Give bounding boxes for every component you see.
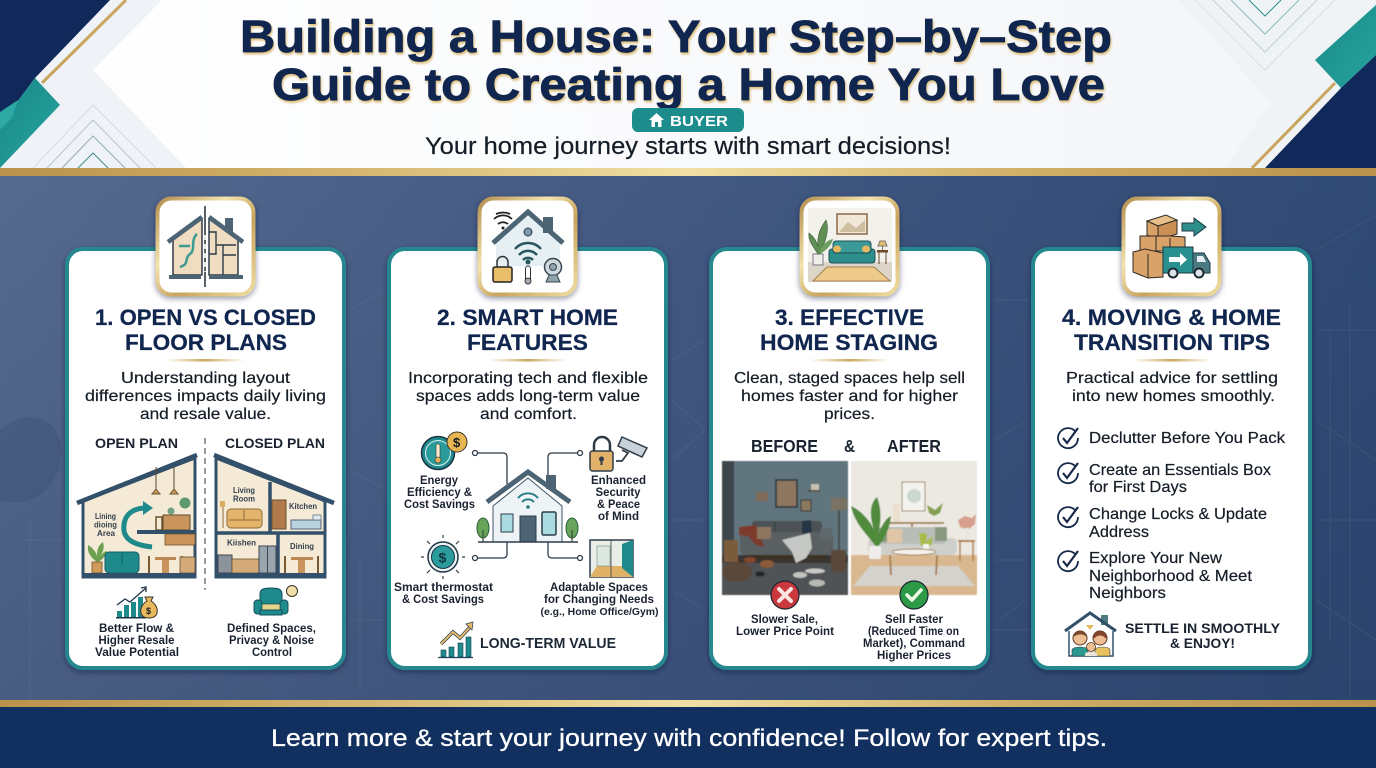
icon: rising bars and money bag: $: [146, 606, 151, 616]
heading: [95, 305, 316, 355]
buyer badge: BUYER: [670, 114, 729, 130]
description: [734, 370, 965, 423]
description: Practical advice for settling: [1066, 370, 1278, 387]
description: differences impacts daily living: [85, 388, 326, 405]
before and after labels: [751, 436, 941, 456]
caption: after: Sell Faster: [885, 612, 943, 626]
panel: moving and home transition tips: [1033, 198, 1310, 668]
title: Building a House: Your Step–by–Step: [240, 11, 1112, 62]
description: [85, 370, 326, 423]
checklist item 2: Create an Essentials Box: [1089, 462, 1271, 479]
caption: closed plan benefit: [227, 621, 316, 659]
closed plan house illustration: Dining: [290, 541, 314, 551]
label: smart thermostat: & Cost Savings: [402, 592, 484, 606]
icon: dollar dial: [421, 535, 465, 579]
icon: thermometer and coin: $: [453, 435, 461, 450]
closed plan house illustration: Kitchen: [289, 501, 317, 511]
caption: before: [736, 612, 834, 638]
closed plan house illustration: [214, 455, 334, 577]
closing message: SETTLE IN SMOOTHLY: [1125, 620, 1281, 636]
heading: FEATURES: [467, 330, 588, 355]
label: enhanced security: & Peace: [597, 497, 640, 511]
heading: [760, 305, 938, 355]
checklist item 3: [1058, 506, 1267, 541]
icon: thermometer and coin: [422, 432, 467, 470]
long-term value label: LONG-TERM VALUE: [480, 635, 616, 652]
heading: [1062, 305, 1281, 355]
icon: staged living room: [802, 198, 898, 294]
label: adaptable spaces: for Changing Needs: [544, 592, 654, 606]
label: energy efficiency: Energy: [420, 473, 458, 487]
label: energy efficiency: Cost Savings: [404, 497, 475, 511]
label: energy efficiency: [404, 473, 475, 511]
central smart house: [477, 472, 578, 542]
description: into new homes smoothly.: [1072, 388, 1275, 405]
heading: 3. EFFECTIVE: [775, 305, 924, 330]
icon: rising bars and money bag: [116, 587, 157, 618]
caption: after: (Reduced Time on: [868, 624, 959, 638]
label: enhanced security: of Mind: [598, 509, 639, 523]
description: homes faster and for higher: [741, 388, 959, 405]
icon: padlock and camera: [590, 437, 647, 471]
icon: smart house: [480, 198, 576, 294]
heading: 4. MOVING & HOME: [1062, 305, 1281, 330]
caption: closed plan benefit: Privacy & Noise: [229, 633, 314, 647]
top gold band: [0, 168, 1376, 176]
caption: open plan benefit: Higher Resale: [98, 633, 175, 647]
buyer badge: [632, 108, 744, 132]
caption: after: Higher Prices: [877, 648, 951, 662]
connector lines: [472, 450, 582, 560]
photo: staged room after: [851, 461, 977, 595]
checklist item 4: Neighbors: [1089, 585, 1166, 602]
label: adaptable spaces: Adaptable Spaces: [550, 580, 648, 594]
label: adaptable spaces: [540, 580, 658, 618]
checklist item 3: Change Locks & Update: [1089, 506, 1267, 523]
caption: before: Slower Sale,: [751, 612, 818, 626]
heading: 1. OPEN VS CLOSED: [95, 305, 316, 330]
heading: HOME STAGING: [760, 330, 938, 355]
caption: after: [863, 612, 965, 662]
plan labels: [95, 435, 325, 451]
description: [408, 370, 648, 423]
photo: cluttered room before: [722, 461, 848, 595]
label: adaptable spaces: (e.g., Home Office/Gym): [540, 606, 658, 618]
before and after labels: BEFORE: [751, 436, 818, 456]
background: blueprint panel: [0, 176, 1376, 701]
footer band: [0, 700, 1376, 768]
checklist item 1: Declutter Before You Pack: [1089, 430, 1286, 447]
description: and comfort.: [480, 406, 577, 423]
closed plan house illustration: Kiishen: [227, 538, 256, 548]
description: spaces adds long-term value: [416, 388, 640, 405]
caption: closed plan benefit: Defined Spaces,: [227, 621, 316, 635]
checklist item 3: Address: [1089, 524, 1149, 541]
checklist item 2: for First Days: [1089, 479, 1187, 496]
closed plan house illustration: Room: [233, 494, 255, 504]
description: Incorporating tech and flexible: [408, 370, 648, 387]
heading: FLOOR PLANS: [125, 330, 287, 355]
closed plan house illustration: Living: [233, 485, 255, 495]
label: enhanced security: [591, 473, 646, 523]
label: smart thermostat: Smart thermostat: [394, 580, 493, 594]
checklist item 4: [1058, 550, 1253, 602]
label: enhanced security: Security: [596, 485, 641, 499]
icon: dollar dial: $: [438, 550, 446, 566]
open plan house illustration: dioing: [94, 520, 117, 530]
heading: 2. SMART HOME: [437, 305, 618, 330]
caption: open plan benefit: Value Potential: [95, 645, 179, 659]
icon: armchair and coin: [254, 586, 298, 615]
open plan house illustration: Lining: [95, 512, 116, 521]
caption: closed plan benefit: Control: [252, 645, 292, 659]
caption: open plan benefit: Better Flow &: [99, 621, 174, 635]
icon: green check: [900, 581, 928, 609]
icon: value growth chart: [438, 622, 473, 658]
panel: open vs closed floor plans: [67, 198, 344, 668]
open plan house illustration: Area: [97, 529, 116, 538]
icon: family in house: [1065, 613, 1116, 656]
icon: adaptable room: [590, 540, 633, 577]
before and after labels: AFTER: [887, 436, 941, 456]
description: [1066, 370, 1278, 405]
checklist item 4: Neighborhood & Meet: [1089, 568, 1253, 585]
label: smart thermostat: [394, 580, 493, 606]
footer band: Learn more & start your journey with confidence! Follow for expert tips.: [271, 725, 1107, 752]
closing message: & ENJOY!: [1170, 635, 1235, 651]
icon: split house: [158, 198, 254, 294]
open plan house illustration: [77, 455, 197, 577]
header banner: [0, 0, 1376, 168]
title: [240, 11, 1112, 110]
label: enhanced security: Enhanced: [591, 473, 646, 487]
heading: TRANSITION TIPS: [1074, 330, 1270, 355]
panel: effective home staging: [711, 198, 988, 668]
icon: red cross: [771, 581, 799, 609]
description: Understanding layout: [121, 370, 291, 387]
caption: open plan benefit: [95, 621, 179, 659]
checklist item 4: Explore Your New: [1089, 550, 1222, 567]
description: prices.: [824, 406, 875, 423]
caption: before: Lower Price Point: [736, 624, 834, 638]
plan labels: OPEN PLAN: [95, 435, 178, 451]
panel: smart home features: [389, 198, 666, 668]
label: energy efficiency: Efficiency &: [407, 485, 472, 499]
heading: [437, 305, 618, 355]
plan labels: CLOSED PLAN: [225, 435, 325, 451]
icon: boxes and moving truck: [1124, 198, 1220, 294]
closing message: [1125, 620, 1281, 651]
title: Guide to Creating a Home You Love: [272, 59, 1105, 110]
before and after labels: &: [844, 436, 855, 456]
description: and resale value.: [140, 406, 271, 423]
checklist item 1: [1058, 428, 1286, 448]
caption: after: Market), Command: [863, 636, 965, 650]
subtitle: Your home journey starts with smart decisions!: [425, 133, 951, 160]
description: Clean, staged spaces help sell: [734, 370, 965, 387]
checklist item 2: [1058, 462, 1271, 496]
